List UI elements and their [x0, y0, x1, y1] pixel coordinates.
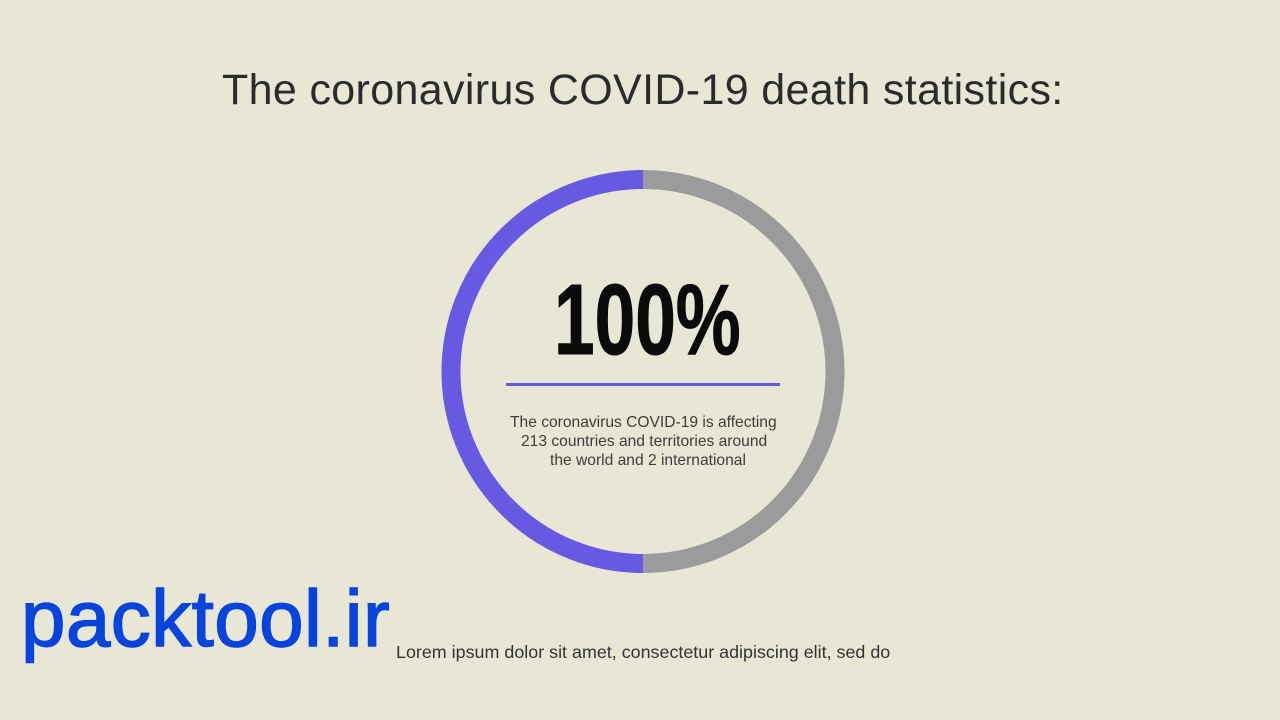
description text — [510, 414, 777, 469]
description text: 213 countries and territories around — [521, 433, 767, 450]
big percentage: 100% — [554, 264, 741, 376]
title: The coronavirus COVID-19 death statistics: — [222, 66, 1064, 114]
description text: the world and 2 international — [550, 452, 746, 469]
donut chart — [442, 170, 844, 573]
gray ring segment — [643, 180, 835, 564]
divider line — [506, 383, 780, 386]
purple ring segment — [451, 180, 643, 564]
description text: The coronavirus COVID-19 is affecting — [510, 414, 777, 431]
footer text: Lorem ipsum dolor sit amet, consectetur adipiscing elit, sed do — [396, 642, 890, 662]
watermark: packtool.ir — [21, 574, 390, 663]
